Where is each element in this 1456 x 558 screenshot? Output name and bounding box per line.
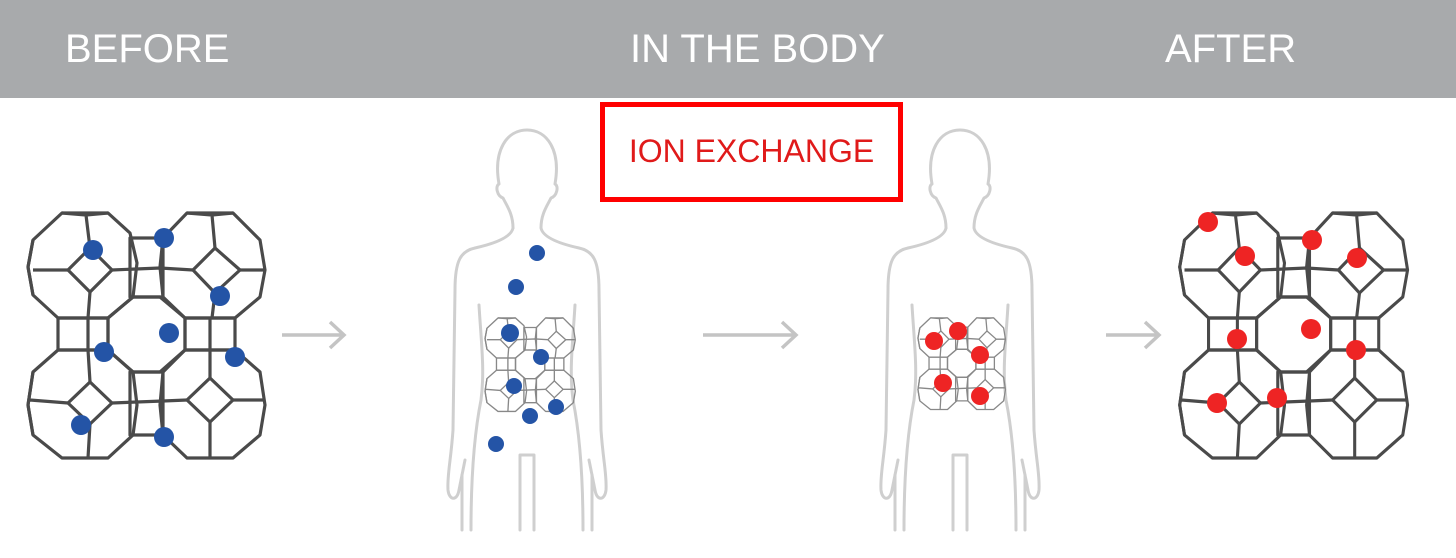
blue ions in body [488,245,564,452]
body 1 with zeolite [448,130,606,530]
body 2 with zeolite [881,130,1039,530]
red ions in body [925,322,989,405]
callout: ion exchange [600,102,903,202]
heading: before: BEFORE [65,27,229,71]
callout: ion exchange: ION EXCHANGE [629,133,874,169]
arrow 1 [282,322,344,348]
heading: in the body: IN THE BODY [630,27,885,71]
red ions [1198,212,1367,413]
zeolite before [28,213,265,458]
zeolite after [1180,212,1408,458]
arrow 2 [703,322,796,348]
heading: after: AFTER [1165,27,1296,71]
header band [0,0,1456,98]
blue ions [71,228,245,447]
arrow 3 [1106,322,1159,348]
